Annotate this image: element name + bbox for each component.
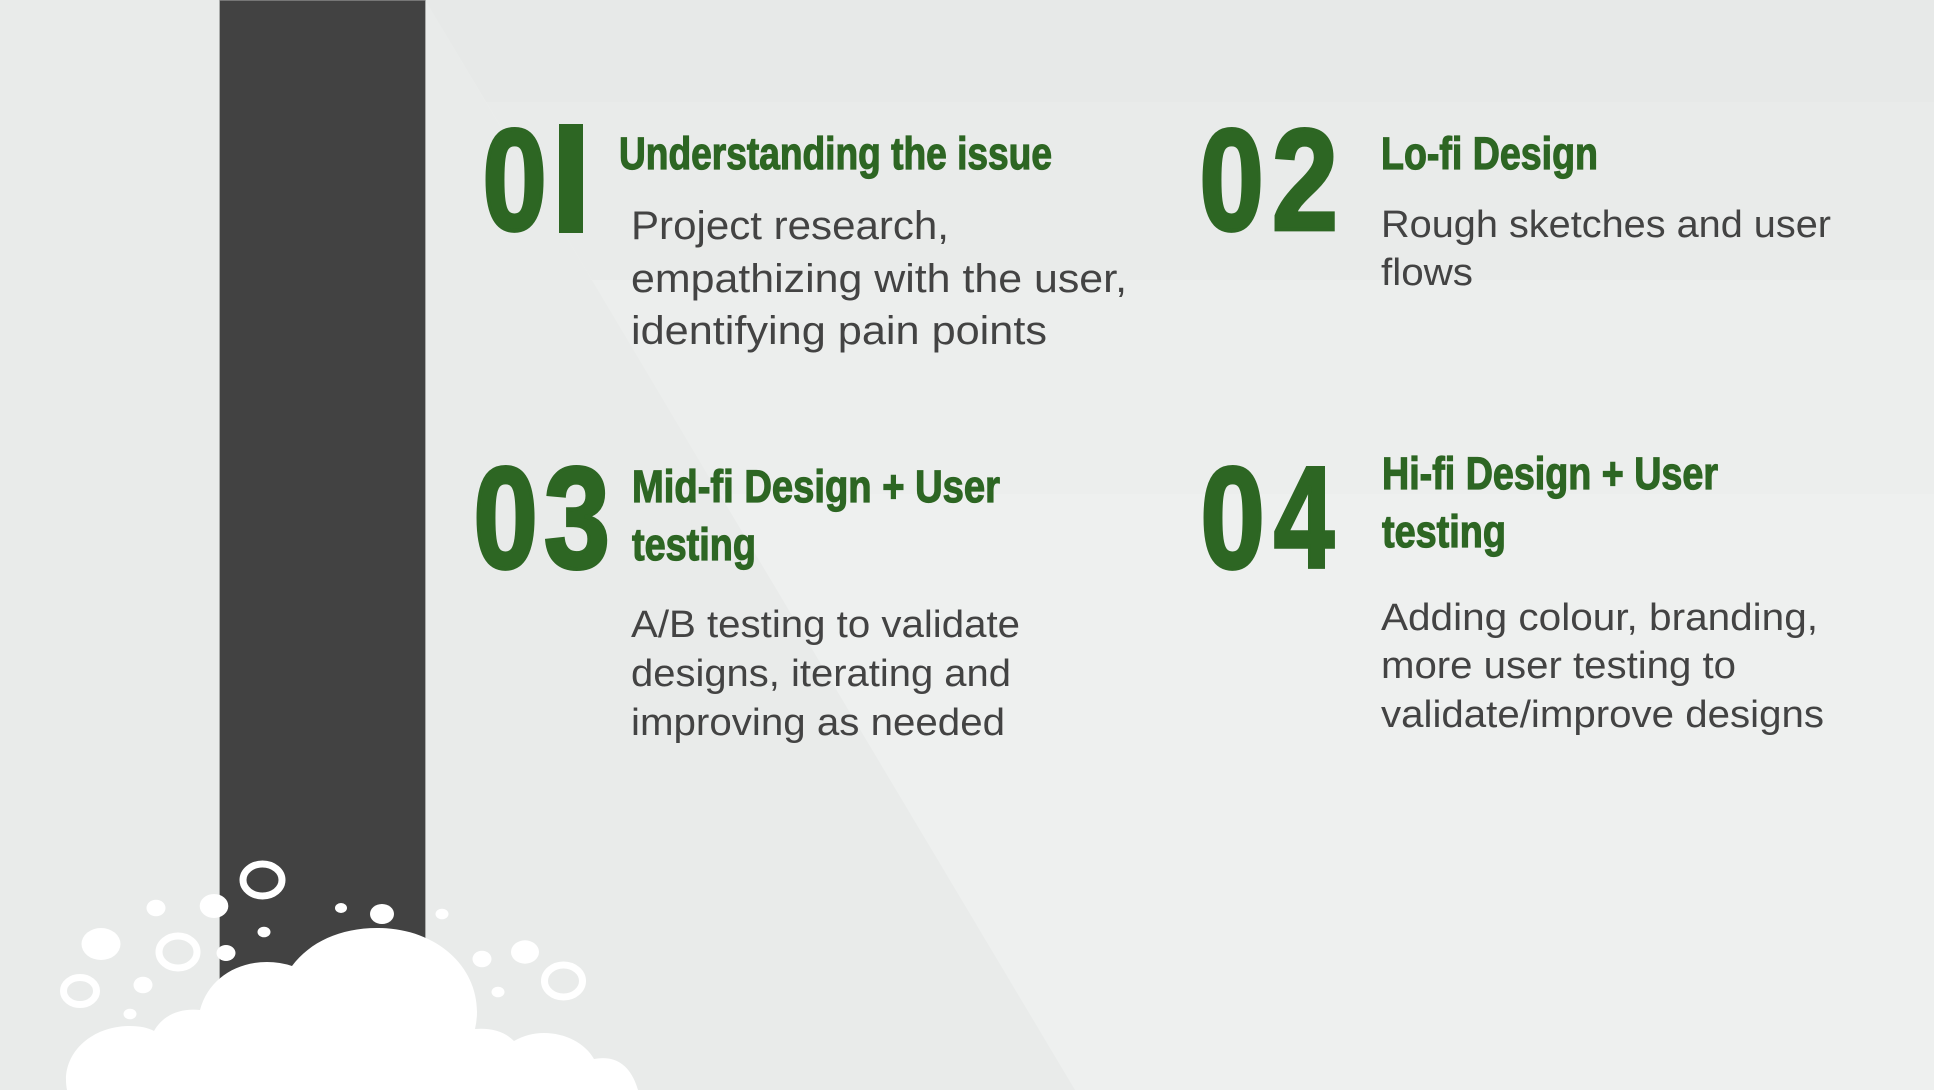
number 02: 2 — [1272, 100, 1338, 260]
bubbles — [82, 894, 539, 1019]
step 04 — [1200, 437, 1824, 736]
heading 03: testing — [632, 519, 756, 570]
body 04: Adding colour, branding, — [1381, 597, 1818, 639]
number 01: 0 — [482, 99, 547, 260]
body 01: empathizing with the user, — [631, 257, 1127, 301]
heading 01: Understanding the issue — [619, 128, 1052, 179]
body 04: validate/improve designs — [1381, 694, 1824, 736]
number 04 — [1200, 437, 1334, 598]
ring bubbles — [64, 864, 582, 1004]
number 04: 0 — [1200, 437, 1265, 598]
number 02: 0 — [1200, 99, 1264, 260]
number 01: 1 — [530, 97, 613, 265]
number 02 — [1200, 99, 1338, 260]
heading 04: Hi-fi Design + User — [1382, 448, 1718, 499]
step 03 — [474, 437, 1020, 744]
heading 03 — [632, 461, 1000, 570]
cloud — [66, 928, 638, 1090]
step 01 — [486, 124, 1124, 352]
body 01: Project research, — [631, 204, 949, 248]
body 02: Rough sketches and user — [1381, 204, 1831, 246]
number 03: 3 — [544, 438, 610, 598]
heading 04 — [1382, 448, 1718, 557]
dark vertical bar — [220, 0, 426, 1000]
cloud with bubbles — [64, 864, 638, 1090]
heading 04: testing — [1382, 506, 1506, 557]
number 03 — [474, 437, 610, 598]
body 02: flows — [1381, 252, 1473, 294]
heading 02: Lo-fi Design — [1381, 128, 1598, 179]
heading 03: Mid-fi Design + User — [632, 461, 1000, 512]
number 03: 0 — [474, 437, 538, 598]
body 03: improving as needed — [631, 702, 1005, 744]
body 04 — [1381, 597, 1824, 736]
body 04: more user testing to — [1381, 645, 1736, 687]
body 01: identifying pain points — [631, 309, 1047, 353]
body 01 — [631, 204, 1127, 353]
body 03: A/B testing to validate — [631, 604, 1020, 646]
body 02 — [1381, 204, 1831, 294]
body 03 — [631, 604, 1020, 744]
number 04: 4 — [1274, 437, 1334, 598]
body 03: designs, iterating and — [631, 653, 1011, 695]
number 01 — [486, 124, 583, 233]
step 02 — [1200, 99, 1831, 294]
